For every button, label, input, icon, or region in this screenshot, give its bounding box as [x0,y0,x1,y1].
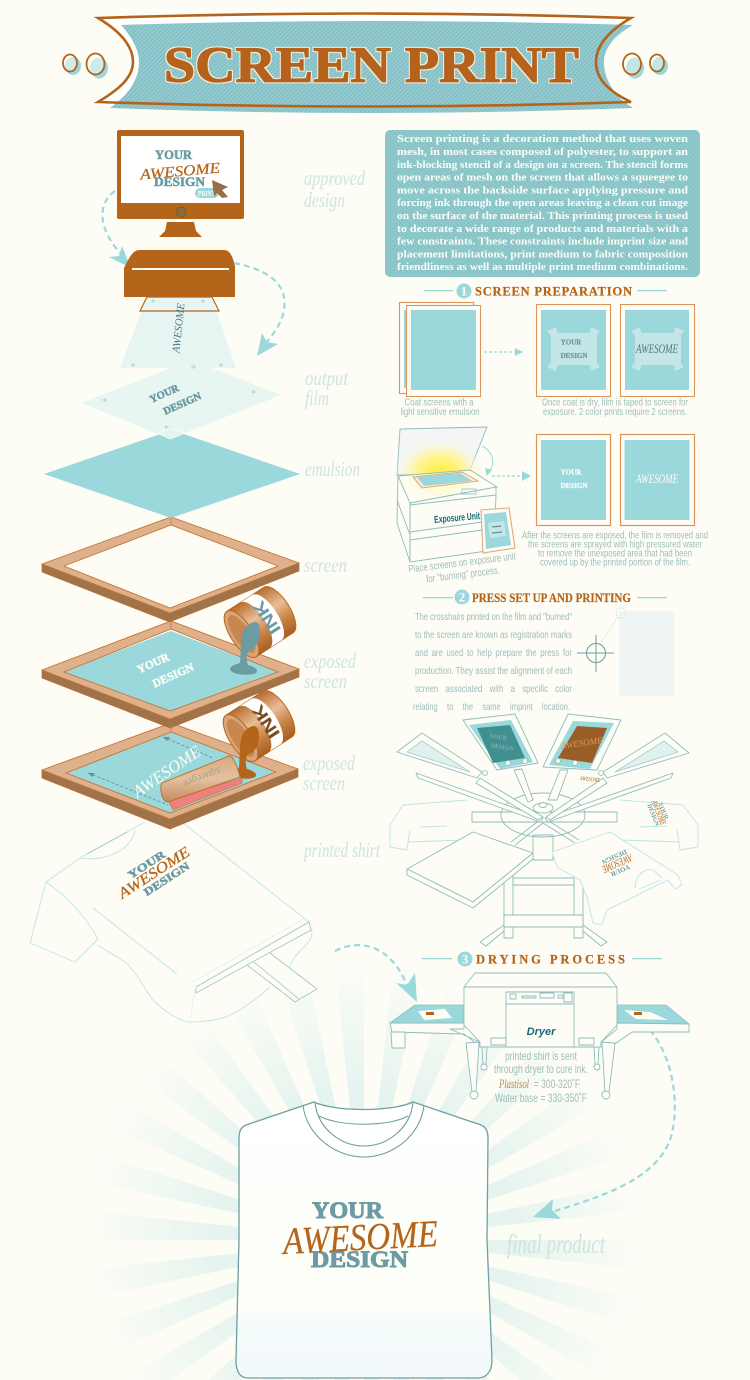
dryer body [464,973,617,1047]
exposed screen label: screen [304,669,347,693]
caption: film taped: exposure. 2 color prints require 2 screens. [543,406,687,418]
banner ornaments [63,54,668,78]
shirt logo: YOUR [126,848,169,882]
brown screen [543,714,621,770]
printed shirt label: printed shirt [303,838,381,862]
panel: intro text: move across the backside surface applying pressure and [397,186,688,196]
right press logo: YOUR [657,802,669,821]
caption: film taped: Once coat is dry, film is taped to screen for [542,396,688,408]
printing press: DESIGN [490,743,515,753]
exposure unit label: Exposure Unit [434,511,481,526]
cursor [212,180,228,198]
screen: washed awesome: AWESOME [635,471,678,486]
screen label: screen [304,553,347,577]
exposed design: DESIGN [151,661,197,690]
shirt logo [110,837,199,911]
final shirt logo: YOUR [312,1198,383,1223]
monitor design logo [138,147,221,189]
heading: press set up and printing: PRESS SET UP AND PRINTING [472,591,631,605]
frame: exposed screen [42,621,299,728]
exposed screen label 2: exposed [303,751,355,775]
ink jar pouring brown [217,685,301,779]
arrow: exposure to washed screens [482,446,531,481]
output film [81,360,281,439]
awesome print: AWESOME [128,742,205,802]
screen: taped film design [536,304,610,396]
isometric printed shirt [30,822,317,1022]
registration diagram [577,608,674,696]
printing press [390,714,698,946]
arrow: dryer to final product [533,1030,675,1219]
squeegee: squeegee [181,764,222,790]
right conveyor [617,1005,689,1024]
caption: dryer: Water base = 330-350˚F [495,1091,587,1105]
small screen card [481,508,515,553]
panel: intro text: Screen printing is a decoration method that uses woven [397,134,688,145]
frame: exposed screen with squeegee [42,723,298,829]
heading: screen preparation: 1 [461,284,467,298]
right press logo: DESIGN [645,803,660,828]
exposed design: YOUR [135,651,172,676]
panel: intro text: forcing ink through the open areas leaving a clean cut image [397,198,688,209]
approved design label: design [304,188,345,212]
registration marks paragraph: The crosshairs printed on the film and "burned" [415,611,572,623]
ink jar pouring teal: INK [249,596,285,638]
caption: burning: Place screens on exposure unit [408,550,516,576]
screens: coated [400,302,480,396]
heading: drying process [422,952,662,966]
screen: taped film awesome [620,304,694,396]
exposed screen label 2: screen [303,771,345,795]
caption: dryer [494,1049,588,1105]
panel: intro text: placement limitations, print medium to fabric composition [397,250,688,260]
monitor design logo: YOUR [155,147,193,162]
caption: film taped [542,396,688,418]
panel: intro text: friendliness as well as multiple print medium combinations. [397,262,688,273]
exposure unit [394,427,515,562]
press arms [416,773,543,822]
caption: coat screens [400,396,480,418]
emulsion label: emulsion [305,457,360,481]
squeeze direction arrows [88,737,213,805]
heading: drying process: DRYING PROCESS [476,952,625,966]
panel: intro text: on the surface of the material. This printing process is used [397,211,688,222]
film print text: AWESOME [170,302,188,355]
caption: dryer: through dryer to cure ink. [494,1062,588,1076]
arrow: printed shirt to dryer [335,945,417,1002]
press base [504,870,583,938]
exposed screen label: exposed [304,649,356,673]
emulsion layer [44,430,300,518]
shirt on press [552,832,682,925]
output film label [305,366,349,410]
icon: printer [124,250,235,367]
squeegee [161,756,242,810]
heading: press set up and printing: 2 [459,590,465,604]
screen: washed design [536,434,610,526]
screen: taped film awesome: AWESOME [635,341,678,356]
panel: intro text [385,130,700,277]
left conveyor [390,1005,464,1023]
screen: taped film design: YOUR [561,338,582,346]
screen: washed design: YOUR [561,468,582,476]
arrow: monitor to printer [102,191,131,268]
registration marks paragraph [413,611,572,713]
right press logo [645,797,670,829]
icon: monitor [117,130,244,237]
shirt logo: DESIGN [142,860,192,899]
far screens [397,733,482,778]
film design text: YOUR [148,383,181,406]
printing press: AWESOME [559,735,604,751]
press shirt logo: DESIGN [600,847,628,866]
exposed design [135,651,197,690]
registration marks paragraph: and are used to help prepare the press for [415,647,572,659]
title banner [98,14,633,113]
caption: washout: covered up by the printed portion of the film. [540,556,690,568]
heading: drying process: 3 [462,952,469,966]
approved design label: approved [304,166,365,190]
title text: SCREEN PRINT [164,38,579,94]
dryer legs [466,1042,615,1092]
press left shirt [390,800,467,850]
final shirt logo: AWESOME [279,1213,439,1263]
arrow: coated to taped [484,348,523,356]
panel: intro text: ink-blocking stencil of a design on a screen. The stencil forms [397,160,688,171]
film design text [148,383,204,418]
caption: coat screens: light sensitive emulsion [400,406,480,418]
caption: dryer: Plastisol [498,1076,529,1091]
panel: intro text: open areas of mesh on the screen that allows a squeegee to [397,172,688,184]
frame: screen [42,517,299,622]
heading: screen preparation: SCREEN PREPARATION [475,284,632,298]
screen: washed design: DESIGN [561,482,587,490]
panel: intro text: mesh, in most cases composed of polyester, to support an [397,147,688,158]
pallet board [407,832,533,902]
panel: intro text: few constraints. These constraints include imprint size and [397,236,688,248]
caption: coat screens: Coat screens with a [404,396,474,408]
screen: washed awesome [620,434,694,526]
ink jar pouring brown: INK [248,700,284,742]
printing press: YOUR [489,734,508,742]
sunburst background [64,940,664,1380]
small platen logo: AWESOME [579,776,600,784]
heading: screen preparation [424,284,667,298]
right press logo: AWESOME [649,798,669,827]
screen: taped film design: DESIGN [561,352,587,360]
caption: dryer: printed shirt is sent [505,1049,577,1063]
registration marks paragraph: screen associated with a specific color [415,683,572,695]
registration marks paragraph: to the screen are known as registration marks [415,629,572,641]
exposed screen label [304,649,356,693]
film light beam [120,297,236,368]
exposed screen label 2 [303,751,355,795]
caption: burning [408,550,516,585]
registration marks paragraph: production. They assist the alignment of each [415,665,572,677]
registration marks paragraph: relating to the same imprint location. [413,701,570,713]
shirt logo: AWESOME [115,844,193,903]
arrow: printer to film [234,263,285,356]
press right shirt [620,800,698,850]
final shirt logo: DESIGN [311,1247,408,1272]
print button: PRINT [198,190,215,198]
monitor design logo: AWESOME [138,161,221,184]
caption: dryer: = 300-320˚F [534,1077,580,1091]
panel: intro text: to decorate a wide range of products and materials with a [397,224,689,235]
press shirt logo [598,846,637,881]
final t-shirt [236,1102,492,1378]
ink jar pouring teal [218,581,302,675]
caption: washout [522,530,708,568]
heading: press set up and printing [423,590,667,605]
dryer [390,973,689,1099]
final shirt logo [279,1198,439,1272]
caption: washout: to remove the unexposed area that had been [538,548,692,560]
film design text: DESIGN [162,391,204,418]
caption: burning: for "burning" process. [426,565,500,585]
approved design label [304,166,365,212]
dryer label: Dryer [527,1026,556,1038]
output film label: output [305,366,349,390]
press shirt logo: YOUR [608,862,631,879]
press shirt logo: AWESOME [600,851,635,875]
monitor design logo: DESIGN [154,174,206,189]
teal screen [463,714,538,770]
output film label: film [305,386,329,410]
final product label: final product [507,1229,606,1259]
